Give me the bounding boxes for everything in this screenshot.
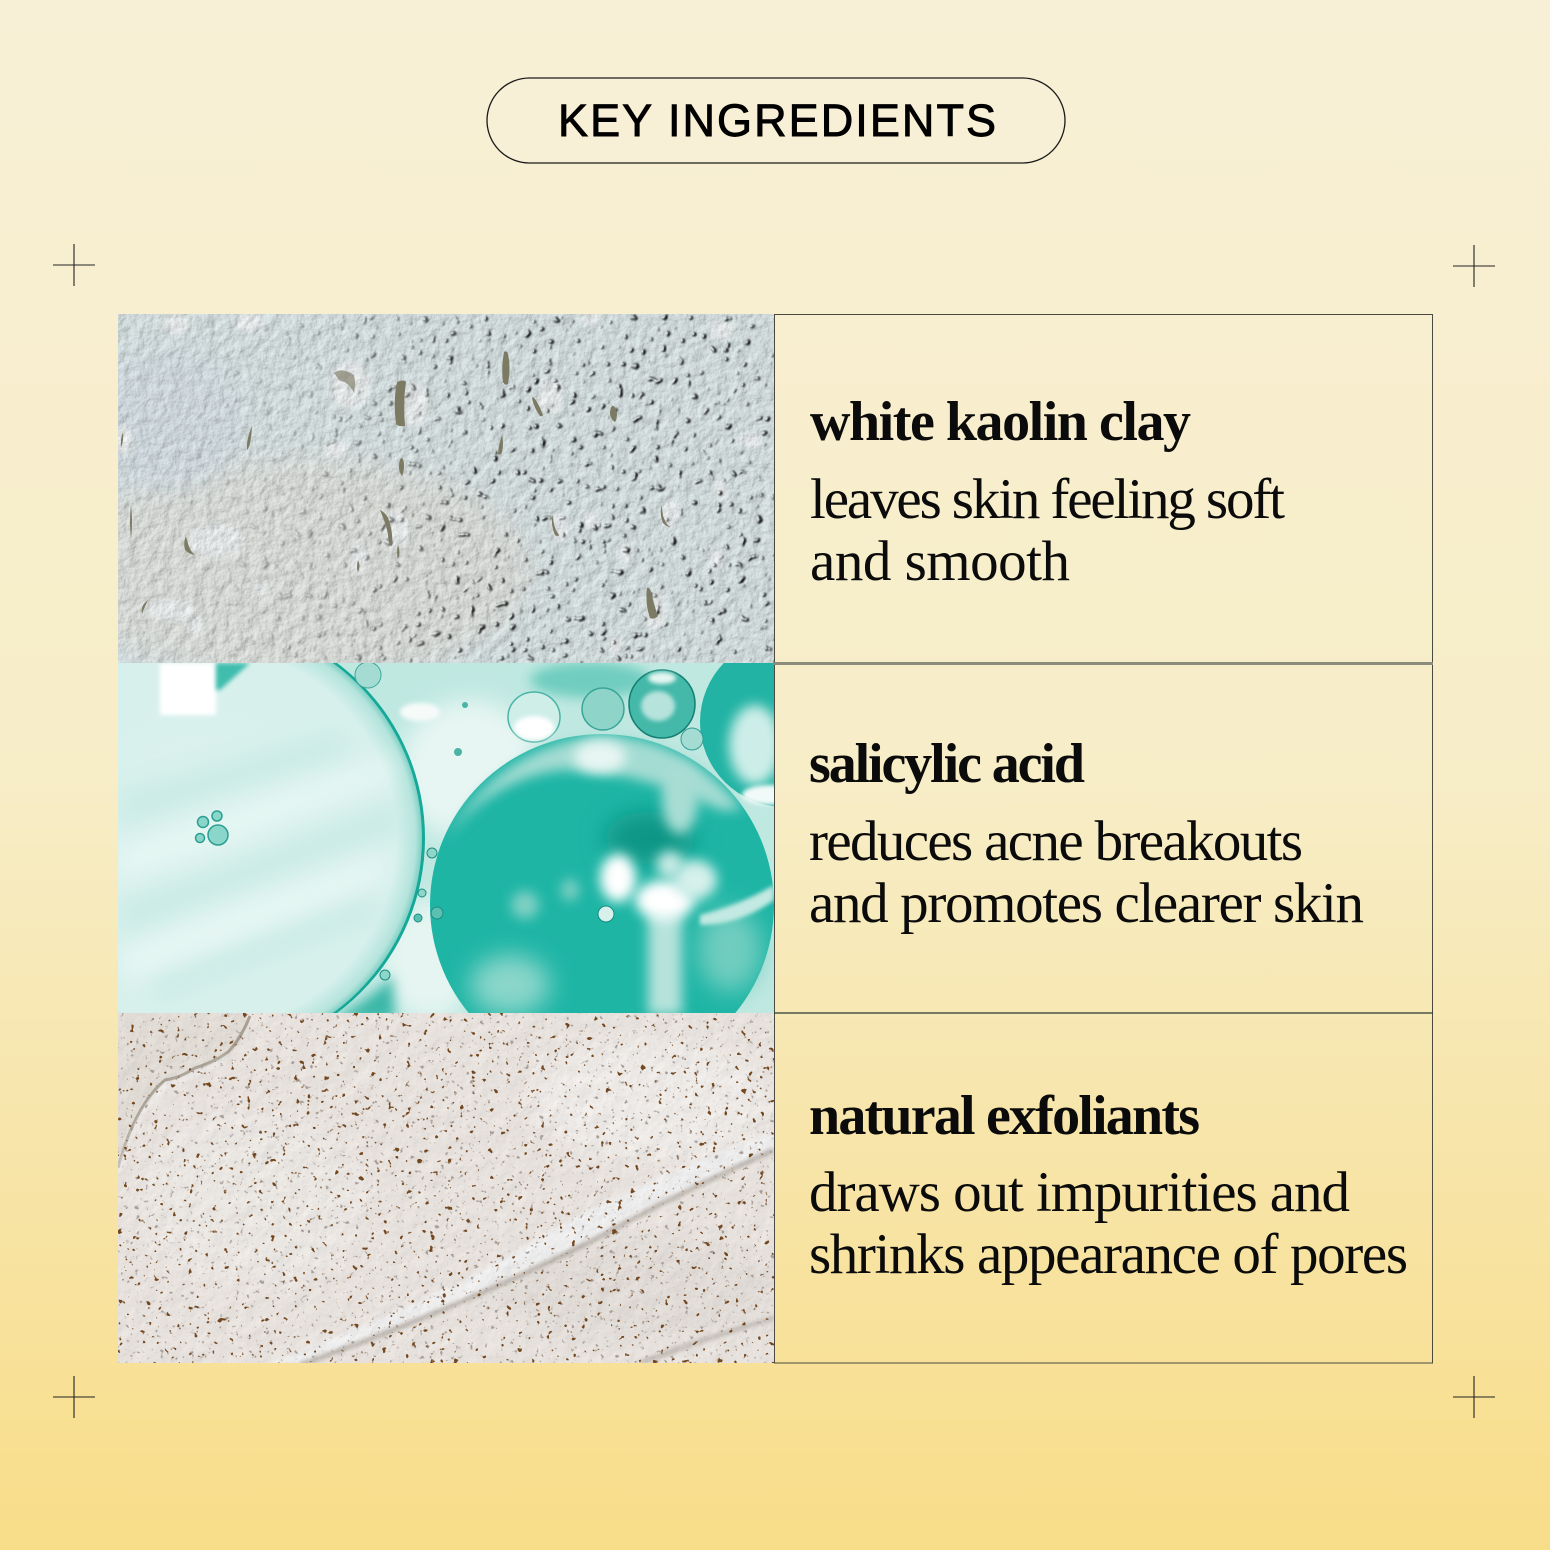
icon: corner crosshair bottom right — [1453, 1376, 1495, 1418]
right bubble — [430, 734, 774, 1013]
text block: white kaolin clay: white kaolin clay — [810, 391, 1191, 453]
text block: natural exfoliants: shrinks appearance of pores — [809, 1223, 1408, 1286]
title: KEY INGREDIENTS — [558, 95, 996, 146]
text block: salicylic acid: and promotes clearer skin — [809, 872, 1364, 935]
text block: salicylic acid: salicylic acid — [809, 733, 1085, 795]
small bubbles — [508, 692, 560, 742]
photo: white kaolin clay texture — [118, 314, 774, 663]
text block: white kaolin clay: and smooth — [810, 530, 1070, 593]
photo: natural exfoliants texture — [118, 1013, 790, 1365]
text block: salicylic acid — [809, 733, 1364, 935]
text block: white kaolin clay — [810, 391, 1285, 593]
text block: white kaolin clay: leaves skin feeling soft — [810, 468, 1285, 531]
text block: natural exfoliants: draws out impurities and — [809, 1161, 1350, 1224]
icon: corner crosshair bottom left — [53, 1376, 95, 1418]
text block: salicylic acid: reduces acne breakouts — [809, 810, 1303, 873]
text block: natural exfoliants: natural exfoliants — [809, 1085, 1200, 1147]
icon: corner crosshair top right — [1453, 245, 1495, 287]
icon: corner crosshair top left — [53, 244, 95, 286]
top right bubble — [700, 663, 774, 806]
title pill — [487, 78, 1065, 163]
panel: ingredient text table — [774, 314, 1433, 1363]
photo: salicylic acid bubbles — [118, 663, 774, 1013]
text block: natural exfoliants — [809, 1085, 1408, 1286]
left bubble — [333, 663, 425, 1013]
